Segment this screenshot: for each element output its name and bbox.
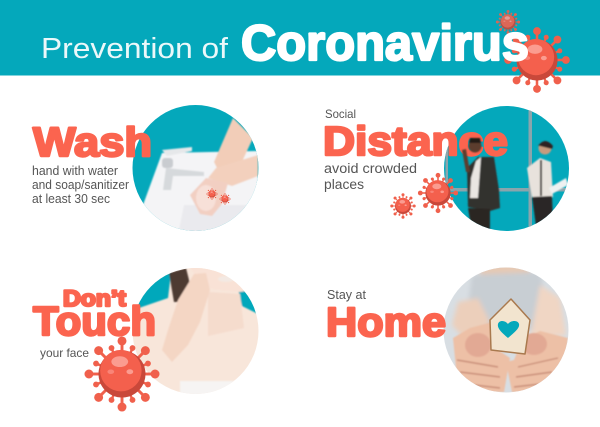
icon: small virus: [390, 193, 416, 219]
heading: home: Home: [326, 299, 446, 345]
text: your face: your face: [40, 346, 89, 360]
text: avoid crowded places: [324, 161, 417, 192]
heading: distance: Distance: [323, 118, 508, 164]
photo: hand on neck: [132, 268, 258, 394]
icon: virus: [84, 336, 160, 412]
icon: large virus in header: [504, 27, 570, 93]
text: stay at: Stay at: [327, 288, 367, 302]
text: wash instructions: [32, 164, 129, 206]
text: wash instructions: hand with water: [32, 164, 118, 178]
text: wash instructions: and soap/sanitizer: [32, 178, 129, 192]
panel: wash: [32, 100, 260, 235]
title: Prevention of: [41, 33, 229, 65]
panel: stay at home: [326, 262, 572, 397]
heading: wash: Wash: [33, 119, 152, 165]
panel: social distance: [324, 106, 569, 231]
photo background: window: [444, 106, 569, 231]
icon: wooden house: [490, 299, 530, 354]
icon: germs on hands: [206, 188, 231, 205]
text: avoid crowded places: avoid crowded: [324, 161, 417, 176]
icon: heart: [498, 321, 519, 338]
heading: don't touch: Touch: [33, 298, 156, 344]
photo: hands holding a house: [444, 268, 568, 392]
title: [41, 15, 529, 71]
panel: don't touch: [33, 262, 262, 412]
text: avoid crowded places: places: [324, 177, 364, 192]
text: wash instructions: at least 30 sec: [32, 192, 110, 206]
title: Coronavirus: [241, 15, 529, 71]
text: social: Social: [325, 107, 356, 121]
heading: don't touch: Don’t: [63, 286, 127, 311]
photo: washing hands: [130, 100, 260, 235]
icon: small virus in header: [496, 10, 520, 34]
icon: large virus: [418, 173, 458, 213]
photo foreground: two men: [462, 138, 568, 232]
header band: [0, 0, 600, 76]
